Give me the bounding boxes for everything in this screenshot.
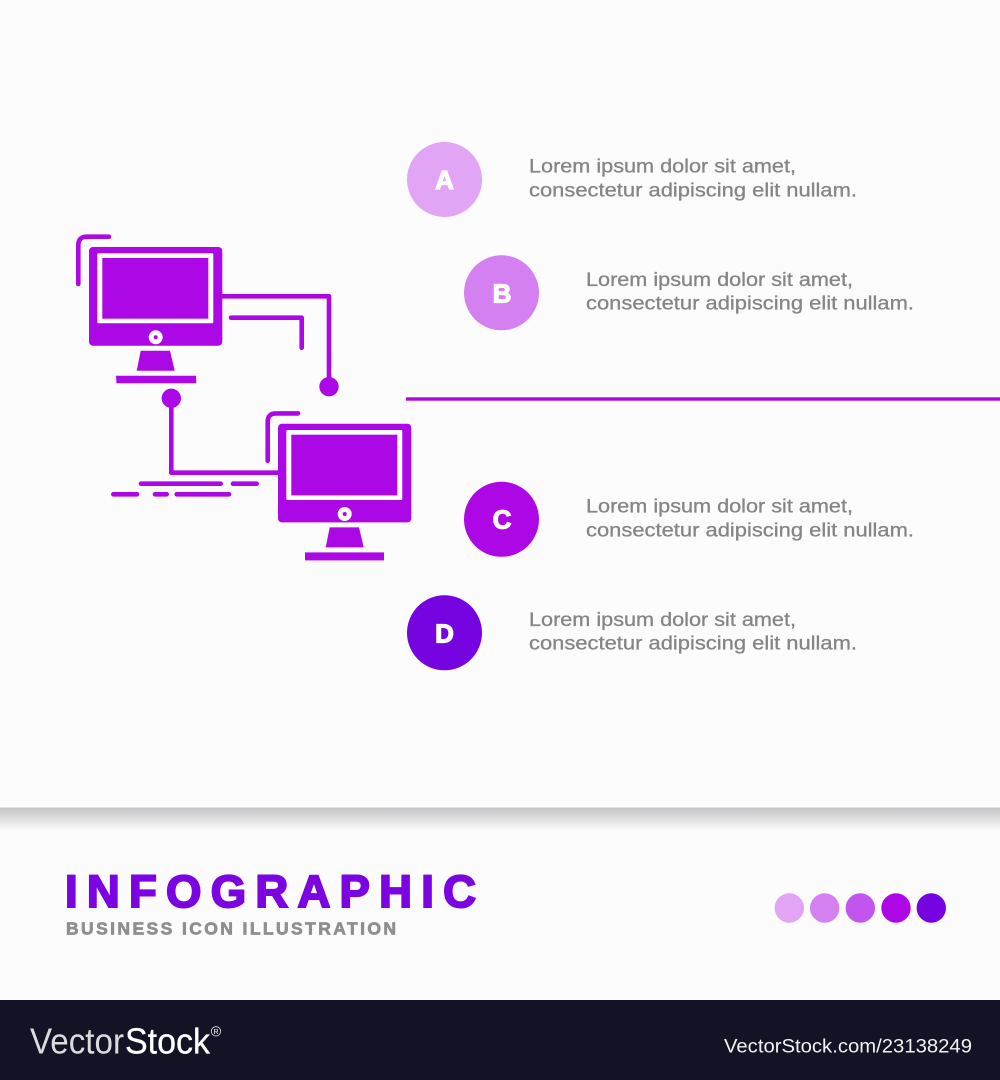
text B: Lorem ipsum dolor sit amet, — [586, 269, 853, 291]
badge A: A — [435, 165, 454, 195]
timeline line — [406, 397, 1000, 401]
logo: VectorStock: R — [213, 1029, 219, 1036]
connector: node to lower monitor — [162, 389, 278, 473]
icon: upper monitor — [78, 237, 222, 383]
connector: upper monitor to node — [222, 296, 339, 396]
image id: VectorStock.com/23138249 — [724, 1036, 972, 1058]
logo: VectorStock — [30, 1020, 221, 1061]
subtitle: BUSINESS ICON ILLUSTRATION — [66, 918, 396, 938]
text A: Lorem ipsum dolor sit amet, — [529, 156, 796, 178]
badge C — [464, 482, 539, 557]
badge D: D — [435, 618, 454, 648]
title: INFOGRAPHIC — [65, 866, 476, 917]
badge B: B — [493, 278, 511, 308]
connector: inner bracket — [231, 318, 302, 348]
text C: Lorem ipsum dolor sit amet, — [586, 496, 853, 518]
text B: consectetur adipiscing elit nullam. — [586, 293, 914, 315]
text D: consectetur adipiscing elit nullam. — [529, 633, 857, 655]
badge C: C — [493, 504, 512, 534]
badge A — [407, 142, 482, 217]
step C — [464, 482, 914, 557]
ground dashes — [113, 484, 257, 494]
footer shadow band — [0, 808, 1000, 830]
icon: two networked computers — [78, 237, 411, 560]
badge D — [407, 595, 482, 670]
logo: VectorStock: Vector — [30, 1020, 124, 1061]
step A — [407, 142, 857, 217]
text C: consectetur adipiscing elit nullam. — [586, 519, 914, 541]
badge B — [464, 255, 539, 330]
icon: lower monitor — [268, 413, 411, 560]
logo: VectorStock: Stock — [125, 1020, 211, 1061]
watermark bar — [0, 1000, 1000, 1080]
text D: Lorem ipsum dolor sit amet, — [529, 609, 796, 631]
text A: consectetur adipiscing elit nullam. — [529, 179, 857, 201]
palette dots — [775, 893, 946, 923]
step B — [464, 255, 914, 330]
step D — [407, 595, 857, 670]
